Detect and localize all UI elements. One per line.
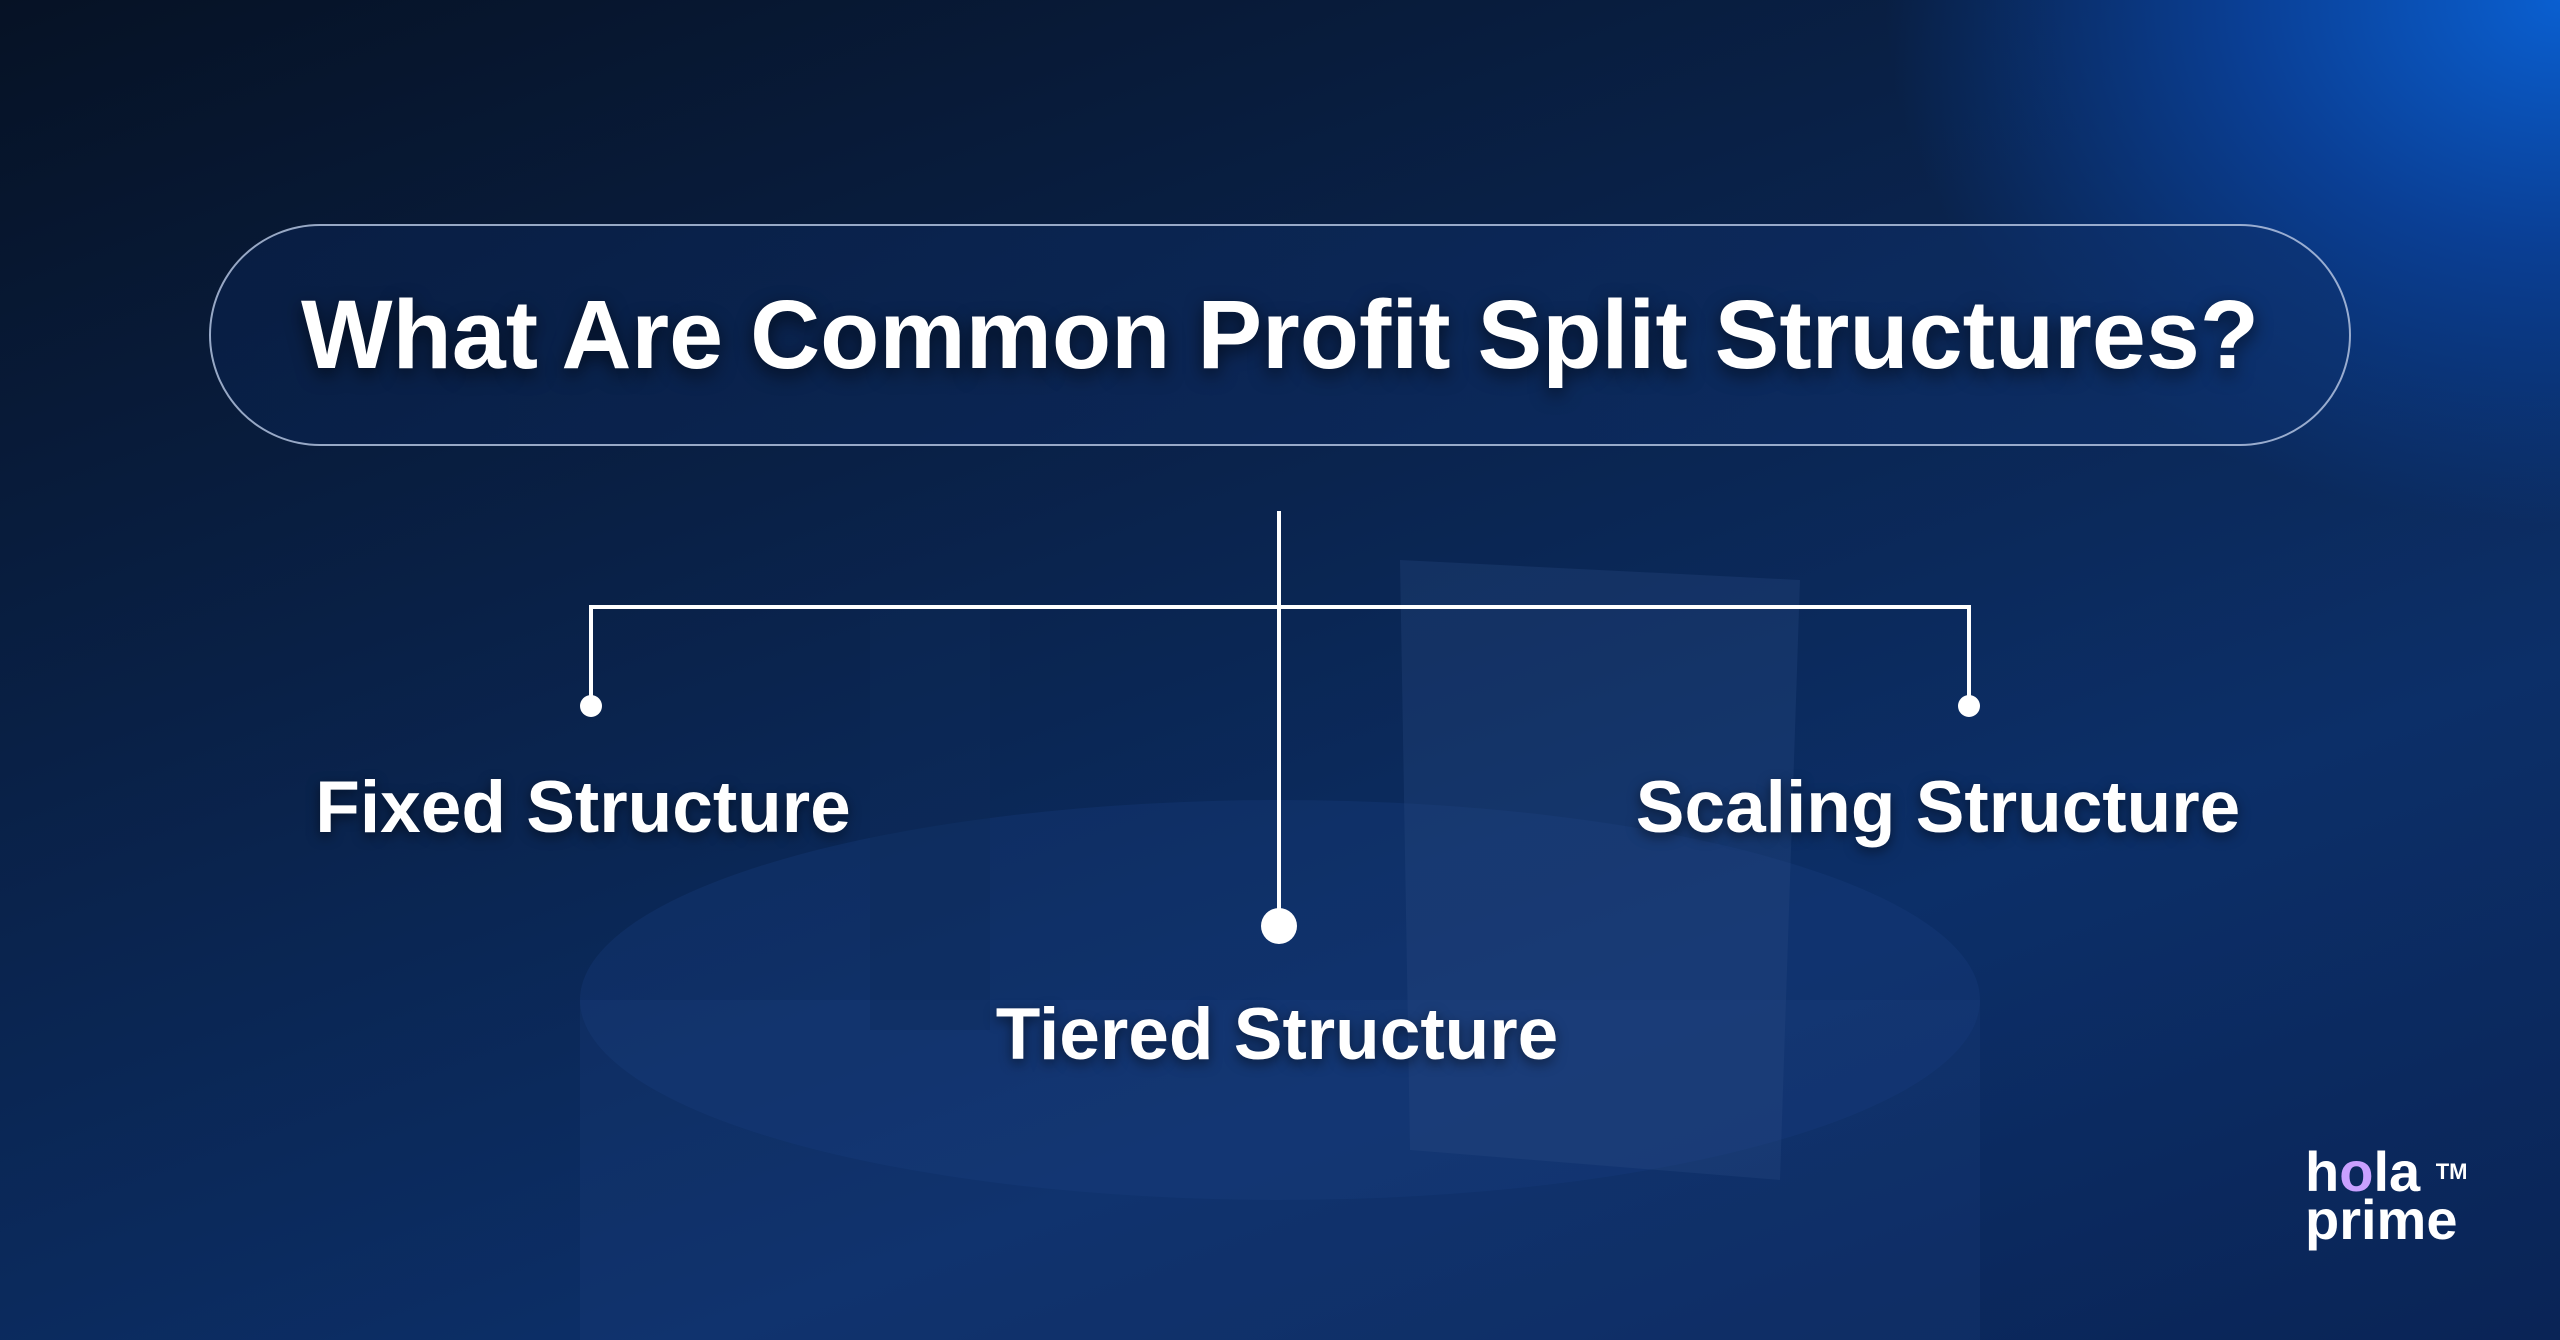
title bbox=[209, 224, 2351, 446]
label: scaling: Scaling Structure bbox=[1636, 767, 2240, 848]
logo: prime bbox=[2305, 1188, 2458, 1251]
label: tiered: Tiered Structure bbox=[996, 994, 1558, 1075]
title: What Are Common Profit Split Structures? bbox=[301, 280, 2259, 389]
logo: hola TM bbox=[2305, 1140, 2467, 1203]
logo bbox=[2305, 1140, 2467, 1251]
label: fixed: Fixed Structure bbox=[315, 767, 851, 848]
